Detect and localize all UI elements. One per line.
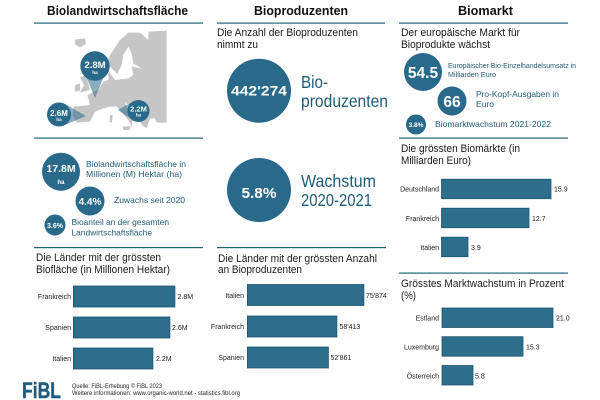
stat: 3.8%	[406, 114, 551, 134]
stat: 3.8%: 3.8%	[409, 122, 424, 129]
stat: 442'274 Bioproduzenten	[227, 59, 388, 123]
callout: Spanien 2.6M: ha	[56, 117, 62, 122]
heading: Biomarkt: Biomarkt	[458, 4, 514, 18]
callout: Italien 2.2M: 2.2M	[130, 104, 147, 114]
callout: Spanien 2.6M: 2.6M	[50, 109, 68, 118]
heading: Marktwachstum: Grösstes Marktwachstum in Prozent	[401, 278, 564, 290]
bar chart: Bioproduzenten	[211, 284, 387, 368]
heading: Länder Biofläche: Die Länder mit der grössten	[36, 252, 161, 264]
bar chart: Marktwachstum: Estland	[416, 316, 439, 322]
stat: 3.6%: 3.6%	[47, 223, 64, 230]
map: grey land	[73, 31, 167, 130]
heading: Länder Bioproduzenten: an Bioproduzenten	[218, 264, 302, 276]
bar chart: Bioproduzenten: 58'413	[340, 324, 360, 331]
stat: 66	[438, 86, 559, 116]
bar chart: Biomärkte: Deutschland	[400, 186, 439, 194]
bar chart: Biofläche: Italien	[52, 356, 71, 363]
stat: 54.5	[404, 53, 576, 91]
bar chart: Marktwachstum: Luxemburg	[404, 344, 439, 352]
subheading: Anzahl Bioproduzenten: Die Anzahl der Bioproduzenten	[217, 27, 358, 39]
bar chart: Bioproduzenten: Spanien	[218, 355, 244, 362]
stat: 66: Pro-Kopf-Ausgaben in	[476, 89, 559, 99]
source note	[72, 383, 240, 397]
stat: 5.8% Wachstum: Wachstum	[301, 171, 376, 191]
stat: 5.8% Wachstum	[227, 158, 376, 222]
bar chart: Bioproduzenten: 75'874	[366, 293, 387, 300]
stat: 442'274 Bioproduzenten: produzenten	[301, 91, 388, 111]
bar chart: Biofläche: 2.8M	[178, 294, 193, 301]
stat: 54.5: Milliarden Euro	[448, 72, 496, 79]
bar chart: Biomärkte	[400, 179, 568, 257]
stat: 54.5: 54.5	[408, 65, 438, 82]
bar chart: Marktwachstum	[404, 308, 570, 385]
stat: 3.6%	[44, 214, 169, 238]
bar chart: Bioproduzenten: Frankreich	[211, 324, 244, 331]
stat: 3.6%: Landwirtschaftsfläche	[72, 228, 152, 238]
callout: Spanien 2.6M	[47, 102, 86, 126]
stat: 442'274 Bioproduzenten: Bio-	[301, 72, 328, 92]
bar chart: Biomärkte: 3.9	[471, 245, 481, 252]
callout: Italien 2.2M: ha	[136, 112, 142, 118]
callout: Frankreich 2.8M: ha	[92, 70, 98, 75]
source note: Weitere informationen: www.organic-world.net - statistics.fibl.org	[72, 391, 240, 397]
subheading: europäischer Markt: Der europäische Markt für	[401, 27, 520, 39]
bar chart: Biomärkte: 12.7	[532, 216, 546, 223]
bar chart: Biofläche: Spanien	[45, 325, 71, 332]
subheading: Anzahl Bioproduzenten: nimmt zu	[217, 39, 258, 51]
heading: grösste Biomärkte: Die grössten Biomärkte (in	[401, 143, 520, 155]
stat: 17.8M ha: Millionen (M) Hektar (ha)	[86, 169, 182, 179]
stat: 442'274 Bioproduzenten: 442'274	[231, 82, 287, 98]
stat: 4.4%: 4.4%	[79, 197, 102, 208]
stat: 54.5: Europäischer Bio-Einzelhandelsumsatz in	[448, 63, 576, 70]
stat: 4.4%	[76, 186, 185, 216]
heading: grösste Biomärkte: Milliarden Euro)	[401, 155, 471, 167]
bar chart: Bioproduzenten: Italien	[225, 293, 244, 300]
bar chart: Biomärkte: Frankreich	[406, 216, 439, 223]
stat: 66: 66	[443, 94, 461, 111]
stat: 3.8%: Biomarktwachstum 2021-2022	[435, 119, 551, 129]
subheading: europäischer Markt: Bioprodukte wächst	[401, 39, 490, 51]
stat: 17.8M ha	[42, 153, 186, 191]
stat: 17.8M ha: Biolandwirtschaftsfläche in	[86, 159, 186, 169]
bar chart: Biofläche: Frankreich	[38, 294, 71, 301]
callout: Frankreich 2.8M: 2.8M	[84, 60, 106, 71]
stat: 4.4%: Zuwachs seit 2020	[114, 195, 185, 205]
callout: Frankreich 2.8M	[80, 51, 110, 98]
stat: 5.8% Wachstum: 5.8%	[242, 186, 277, 202]
bar chart: Biofläche: 2.6M	[172, 325, 188, 332]
heading: Marktwachstum: (%)	[401, 290, 416, 302]
stat: 17.8M ha: ha	[57, 180, 65, 186]
bar chart: Marktwachstum: 21.0	[556, 316, 570, 322]
bar chart: Marktwachstum: 5.8	[475, 374, 485, 380]
bar chart: Biomärkte: Italien	[420, 245, 439, 252]
source note: Quelle: FiBL-Erhebung © FiBL 2023	[72, 383, 163, 390]
stat: 17.8M ha: 17.8M	[46, 163, 76, 175]
stat: 3.6%: Bioanteil an der gesamten	[72, 217, 169, 227]
callout: Italien 2.2M	[118, 100, 150, 122]
bar chart: Biofläche	[38, 286, 193, 369]
stat: 5.8% Wachstum: 2020-2021	[301, 190, 372, 210]
heading: Länder Biofläche: Biofläche (in Millionen Hektar)	[36, 264, 170, 276]
bar chart: Marktwachstum: Österreich	[407, 372, 439, 380]
heading: Länder Bioproduzenten: Die Länder mit der grössten Anzahl	[218, 253, 377, 265]
bar chart: Bioproduzenten: 52'861	[330, 355, 351, 362]
bar chart: Biomärkte: 15.9	[554, 186, 568, 194]
bar chart: Marktwachstum: 15.3	[526, 344, 540, 352]
map of Europe with callouts	[47, 31, 167, 130]
bar chart: Biofläche: 2.2M	[156, 356, 172, 363]
stat: 66: Euro	[476, 99, 494, 109]
heading: Biolandwirtschaftsfläche: Biolandwirtschaftsfläche	[47, 4, 188, 18]
heading: Bioproduzenten: Bioproduzenten	[254, 4, 348, 18]
